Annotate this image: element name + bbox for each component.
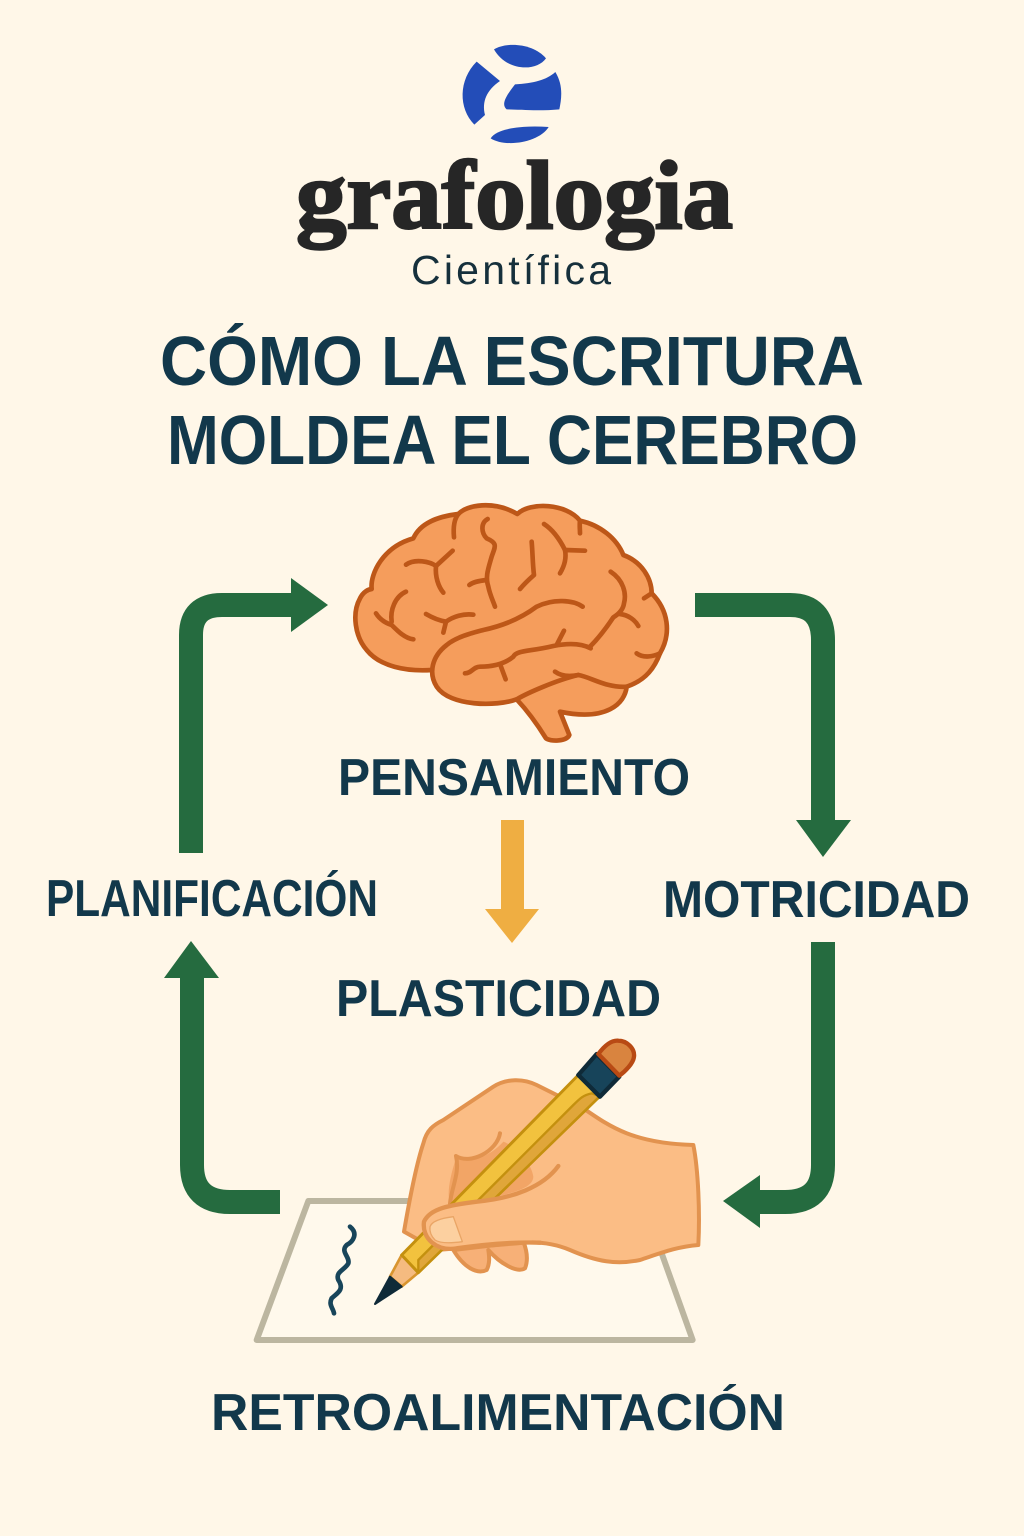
label: motricidad: MOTRICIDAD xyxy=(663,871,970,929)
logo subtitle: Científica xyxy=(411,247,611,293)
arrow: hand to planificacion xyxy=(164,941,280,1202)
arrow: motricidad to hand xyxy=(723,942,823,1228)
paper sheet xyxy=(257,1201,693,1340)
thumb xyxy=(424,1166,583,1249)
hand back xyxy=(404,1080,699,1262)
curled fingers xyxy=(453,1242,527,1271)
arrow: planificacion to brain xyxy=(191,578,328,853)
logo wordmark: grafologia xyxy=(296,142,733,250)
title: CÓMO LA ESCRITURA xyxy=(160,322,864,400)
label: planificacion: PLANIFICACIÓN xyxy=(46,870,378,928)
pencil xyxy=(375,1041,634,1304)
label: plasticidad: PLASTICIDAD xyxy=(336,970,661,1028)
icon: hand writing on paper xyxy=(257,1041,699,1340)
label: pensamiento: PENSAMIENTO xyxy=(338,749,690,807)
arrow: orange, pensamiento to plasticidad xyxy=(485,820,539,943)
icon: brain xyxy=(355,505,667,741)
arrow: brain to motricidad xyxy=(695,605,851,857)
palm crease xyxy=(450,1133,500,1203)
label: retroalimentacion: RETROALIMENTACIÓN xyxy=(211,1384,785,1442)
palm shadow xyxy=(449,1142,533,1203)
logo icon: blue globe xyxy=(463,45,561,143)
title xyxy=(160,322,864,479)
ink squiggle xyxy=(331,1227,354,1313)
thumbnail xyxy=(430,1217,462,1243)
title: MOLDEA EL CEREBRO xyxy=(167,401,858,479)
